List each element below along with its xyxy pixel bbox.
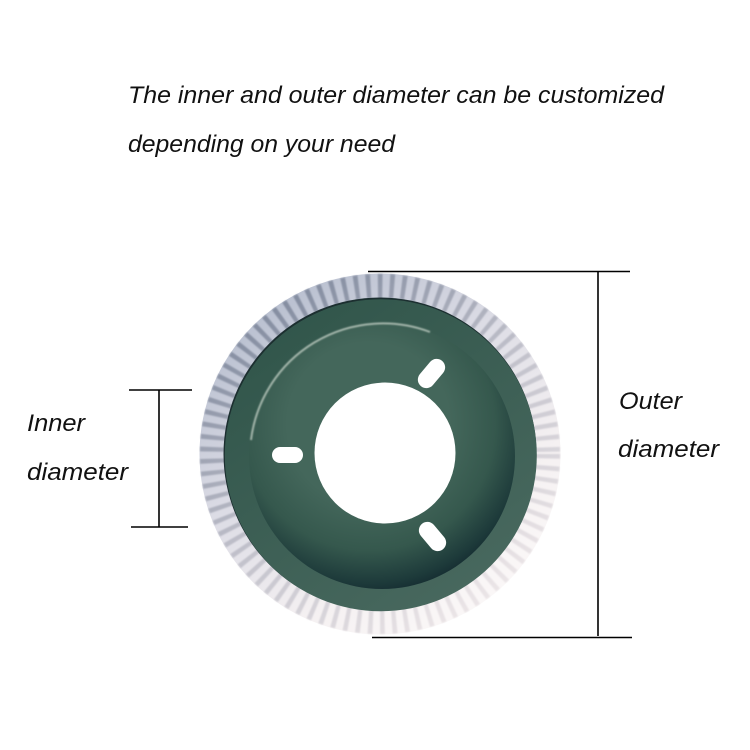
inner diameter label — [27, 410, 129, 486]
heading text: The inner and outer diameter can be customized — [128, 82, 665, 109]
outer diameter label — [618, 388, 720, 463]
green flange — [224, 298, 537, 611]
inner diameter dimension — [129, 390, 192, 527]
inner diameter label: diameter — [27, 459, 129, 486]
inner diameter label: Inner — [27, 410, 86, 437]
dark recess — [249, 323, 515, 589]
outer diameter label: diameter — [618, 436, 720, 463]
centre hole — [314, 382, 456, 524]
outer diameter dimension — [368, 271, 632, 638]
outer diameter label: Outer — [619, 388, 683, 415]
mounting slots — [272, 355, 450, 555]
white toothed rim — [197, 271, 563, 637]
gear wheel — [197, 271, 563, 637]
heading text — [128, 82, 665, 158]
heading text: depending on your need — [128, 131, 396, 158]
